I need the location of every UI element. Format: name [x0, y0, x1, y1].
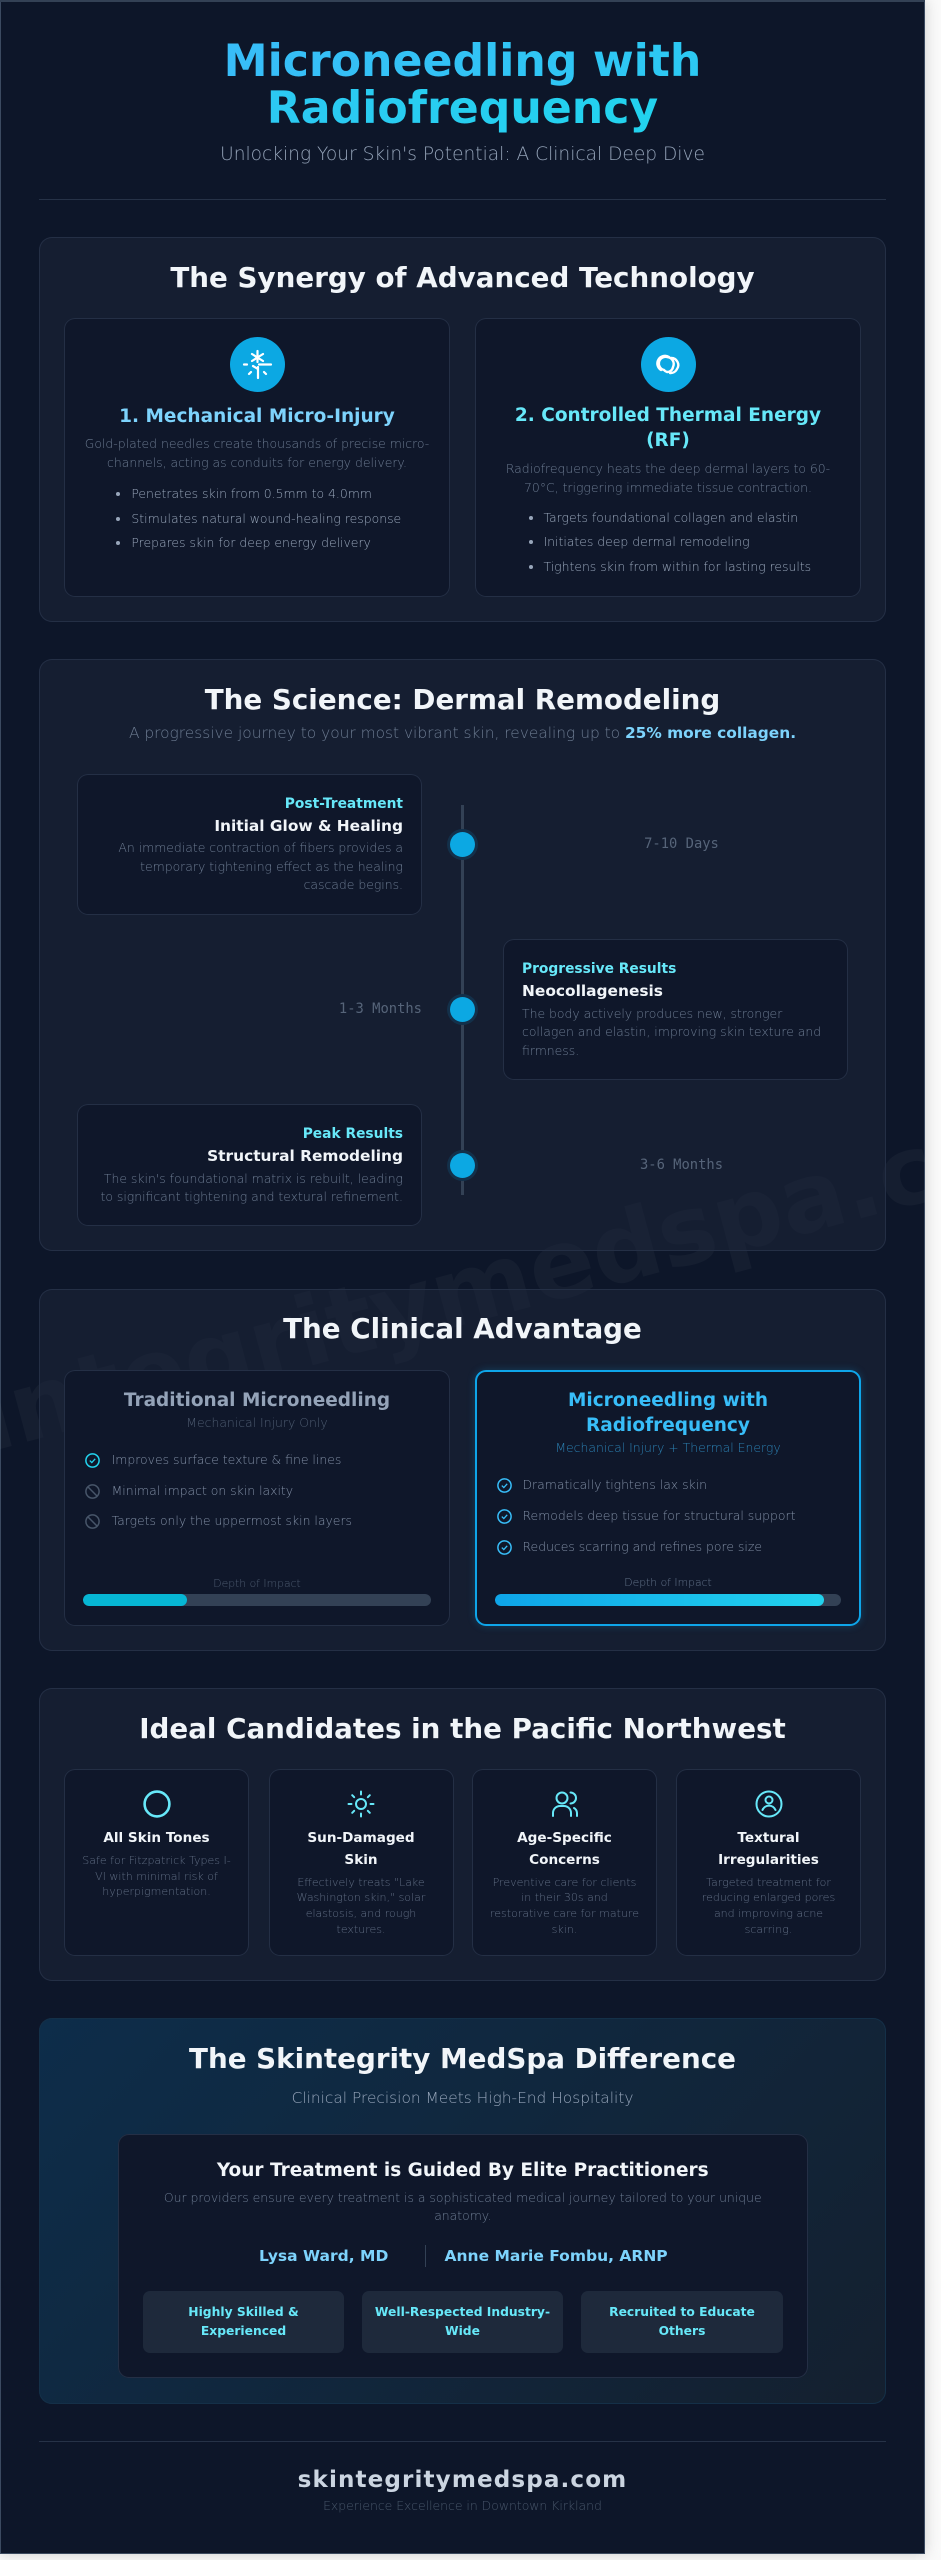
- title: Microneedling with: [224, 36, 701, 86]
- feature text: Targets only the uppermost skin layers: [112, 1513, 352, 1528]
- step text: cascade begins.: [304, 877, 403, 892]
- step text: firmness.: [522, 1043, 579, 1058]
- candidate card: textural irregularities: [676, 1769, 861, 1956]
- panel: dermal remodeling timeline: [39, 659, 886, 1251]
- chip: respected: Well-Respected Industry-: [375, 2305, 550, 2319]
- card description: 70°C, triggering immediate tissue contraction.: [524, 480, 812, 495]
- candidate text: in their 30s and: [521, 1891, 608, 1904]
- card description: [506, 461, 830, 495]
- timeline line: [461, 805, 464, 1195]
- depth bar: [495, 1594, 841, 1606]
- card description: Radiofrequency heats the deep dermal layers to 60-: [506, 461, 830, 476]
- step card: neocollagenesis: [503, 939, 848, 1080]
- heading: clinical advantage: The Clinical Advantage: [283, 1312, 642, 1345]
- candidate title: Textural: [737, 1830, 800, 1846]
- candidate card: skin tones: [64, 1769, 249, 1956]
- step text: [522, 1006, 821, 1058]
- depth bar: [83, 1594, 431, 1606]
- step text: An immediate contraction of fibers provides a: [118, 840, 403, 855]
- chip: respected: [362, 2291, 563, 2353]
- bullet list: [529, 510, 811, 574]
- candidate text: [82, 1854, 231, 1898]
- step label: Progressive Results: [522, 961, 676, 977]
- card heading: Your Treatment is Guided By Elite Practitioners: [217, 2160, 709, 2181]
- practitioners card: [118, 2134, 808, 2378]
- card title: 1. Mechanical Micro-Injury: [119, 406, 395, 427]
- candidate text: hyperpigmentation.: [102, 1885, 211, 1898]
- card: mechanical micro-injury: [64, 318, 450, 597]
- timeline dot 2: [450, 996, 475, 1022]
- icon: ring: [143, 1790, 171, 1818]
- candidate text: [297, 1876, 426, 1936]
- feature text: Reduces scarring and refines pore size: [522, 1539, 762, 1554]
- bullet list: Penetrates skin from 0.5mm to 4.0mm: [131, 486, 372, 501]
- icon: check: [497, 1540, 512, 1555]
- chip: educators: Recruited to Educate: [609, 2305, 755, 2319]
- card description: [85, 436, 429, 470]
- icon: ban: [85, 1514, 100, 1529]
- step card: structural remodeling: [77, 1104, 422, 1226]
- candidate text: and improving acne: [714, 1907, 823, 1920]
- comparison card: microneedling with rf: [475, 1370, 861, 1626]
- intro text: A progressive journey to your most vibrant skin, revealing up to 25% more collagen.: [129, 724, 796, 742]
- icon: check: [497, 1509, 512, 1524]
- time label: 1-3 months: 1-3 Months: [339, 1001, 422, 1017]
- candidate text: restorative care for mature: [490, 1907, 639, 1920]
- card title: Radiofrequency: [586, 1415, 750, 1436]
- time label: 7-10 days: 7-10 Days: [644, 836, 719, 852]
- candidate text: Targeted treatment for: [706, 1876, 831, 1889]
- feature text: Dramatically tightens lax skin: [522, 1477, 707, 1492]
- chip: educators: [581, 2291, 783, 2353]
- card subtitle: Mechanical Injury Only: [186, 1415, 328, 1430]
- card title: [515, 405, 821, 451]
- subheading: Clinical Precision Meets High-End Hospitality: [292, 2089, 633, 2107]
- timeline dot 3: [450, 1152, 475, 1178]
- step text: collagen and elastin, improving skin texture and: [522, 1024, 821, 1039]
- candidate text: [702, 1876, 835, 1936]
- candidate title: [517, 1830, 612, 1868]
- heading: ideal candidates: Ideal Candidates in the Pacific Northwest: [139, 1712, 786, 1745]
- icon: check: [497, 1478, 512, 1493]
- card description: Gold-plated needles create thousands of precise micro-: [85, 436, 429, 451]
- candidate title: Irregularities: [718, 1852, 819, 1868]
- chip: educators: Others: [659, 2324, 705, 2338]
- bullet list: Stimulates natural wound-healing response: [131, 511, 401, 526]
- step title: Structural Remodeling: [207, 1147, 403, 1165]
- candidate title: Age-Specific: [517, 1830, 612, 1846]
- card text: [164, 2190, 762, 2223]
- card title: 2. Controlled Thermal Energy: [515, 405, 821, 426]
- feature text: Improves surface texture & fine lines: [112, 1452, 341, 1467]
- step text: The skin's foundational matrix is rebuilt, leading: [104, 1170, 403, 1186]
- subtitle: Unlocking Your Skin's Potential: A Clinical Deep Dive: [220, 144, 705, 165]
- step text: The body actively produces new, stronger: [522, 1006, 782, 1021]
- card: controlled thermal energy: [475, 318, 861, 597]
- chip: respected: Wide: [445, 2324, 480, 2338]
- icon: rf waves: [640, 337, 696, 392]
- step text: [118, 840, 403, 892]
- feature text: Remodels deep tissue for structural support: [522, 1508, 795, 1523]
- panel: skintegrity difference: [39, 2018, 886, 2404]
- candidate text: elastosis, and rough: [306, 1907, 416, 1920]
- icon: users: [552, 1792, 578, 1817]
- card description: channels, acting as conduits for energy delivery.: [107, 455, 407, 470]
- step label: Peak Results: [303, 1126, 403, 1142]
- candidate card: sun damage: [268, 1769, 454, 1956]
- icon: check: [85, 1453, 100, 1468]
- bullet list: Targets foundational collagen and elastin: [544, 510, 798, 525]
- candidate title: [718, 1830, 819, 1868]
- heading: science: The Science: Dermal Remodeling: [205, 683, 720, 716]
- candidate text: VI with minimal risk of: [95, 1870, 218, 1883]
- card title: (RF): [646, 430, 690, 451]
- depth label: Depth of Impact: [213, 1577, 301, 1590]
- panel: ideal candidates: [39, 1688, 886, 1981]
- practitioner name: Anne Marie Fombu, ARNP: [444, 2247, 668, 2265]
- footer website: skintegritymedspa.com: [298, 2467, 627, 2493]
- heading: synergy: The Synergy of Advanced Technology: [170, 260, 755, 294]
- candidate title: [307, 1830, 415, 1868]
- candidate title: Sun-Damaged: [307, 1830, 415, 1846]
- candidate title: All Skin Tones: [103, 1830, 210, 1846]
- icon: ban: [85, 1484, 100, 1499]
- icon: sun: [348, 1790, 374, 1818]
- footer tagline: Experience Excellence in Downtown Kirkland: [323, 2498, 602, 2513]
- candidate title: Skin: [344, 1852, 378, 1868]
- card text: Our providers ensure every treatment is a sophisticated medical journey tailored to your unique: [164, 2190, 762, 2205]
- card title: [568, 1390, 768, 1436]
- panel: synergy of advanced technology: [39, 237, 886, 622]
- candidate text: textures.: [337, 1923, 385, 1936]
- candidate text: skin.: [552, 1923, 577, 1936]
- step label: Post-Treatment: [285, 796, 403, 812]
- practitioner name: Lysa Ward, MD: [259, 2247, 388, 2265]
- candidate card: age concerns: [472, 1769, 657, 1956]
- panel: clinical advantage: [39, 1289, 886, 1651]
- step card: initial glow: [77, 774, 422, 915]
- title: [224, 36, 701, 134]
- timeline dot 1: [450, 832, 475, 856]
- candidate text: Preventive care for clients: [493, 1876, 636, 1889]
- candidate text: Washington skin," solar: [297, 1891, 425, 1904]
- bullet list: Prepares skin for deep energy delivery: [131, 535, 371, 550]
- card title: Microneedling with: [568, 1390, 768, 1411]
- bullet list: Initiates deep dermal remodeling: [544, 534, 750, 549]
- chip: skilled: Experienced: [201, 2324, 286, 2338]
- step text: [100, 1170, 403, 1204]
- feature text: Minimal impact on skin laxity: [112, 1483, 293, 1498]
- candidate title: Concerns: [529, 1852, 600, 1868]
- card subtitle: Mechanical Injury + Thermal Energy: [555, 1440, 781, 1455]
- icon: needle burst: [230, 337, 284, 392]
- step title: Neocollagenesis: [522, 982, 663, 1000]
- time label: 3-6 months: 3-6 Months: [640, 1157, 723, 1173]
- bullet list: [116, 486, 401, 550]
- step title: Initial Glow & Healing: [214, 817, 403, 835]
- card title: Traditional Microneedling: [124, 1390, 390, 1411]
- step text: to significant tightening and textural refinement.: [100, 1189, 403, 1204]
- bullet list: Tightens skin from within for lasting results: [544, 559, 811, 574]
- chip: skilled: [143, 2291, 344, 2353]
- candidate text: [490, 1876, 639, 1936]
- card text: anatomy.: [434, 2208, 491, 2223]
- candidate text: Effectively treats "Lake: [297, 1876, 425, 1889]
- title: Radiofrequency: [267, 82, 658, 134]
- depth label: Depth of Impact: [624, 1576, 712, 1589]
- candidate text: scarring.: [745, 1923, 792, 1936]
- candidate text: Safe for Fitzpatrick Types I-: [82, 1854, 231, 1867]
- step text: temporary tightening effect as the healing: [140, 859, 403, 874]
- heading: difference: The Skintegrity MedSpa Difference: [189, 2042, 736, 2075]
- comparison card: traditional: [64, 1370, 450, 1626]
- chip: skilled: Highly Skilled &: [188, 2305, 299, 2319]
- icon: face: [756, 1790, 782, 1818]
- candidate text: reducing enlarged pores: [702, 1891, 835, 1904]
